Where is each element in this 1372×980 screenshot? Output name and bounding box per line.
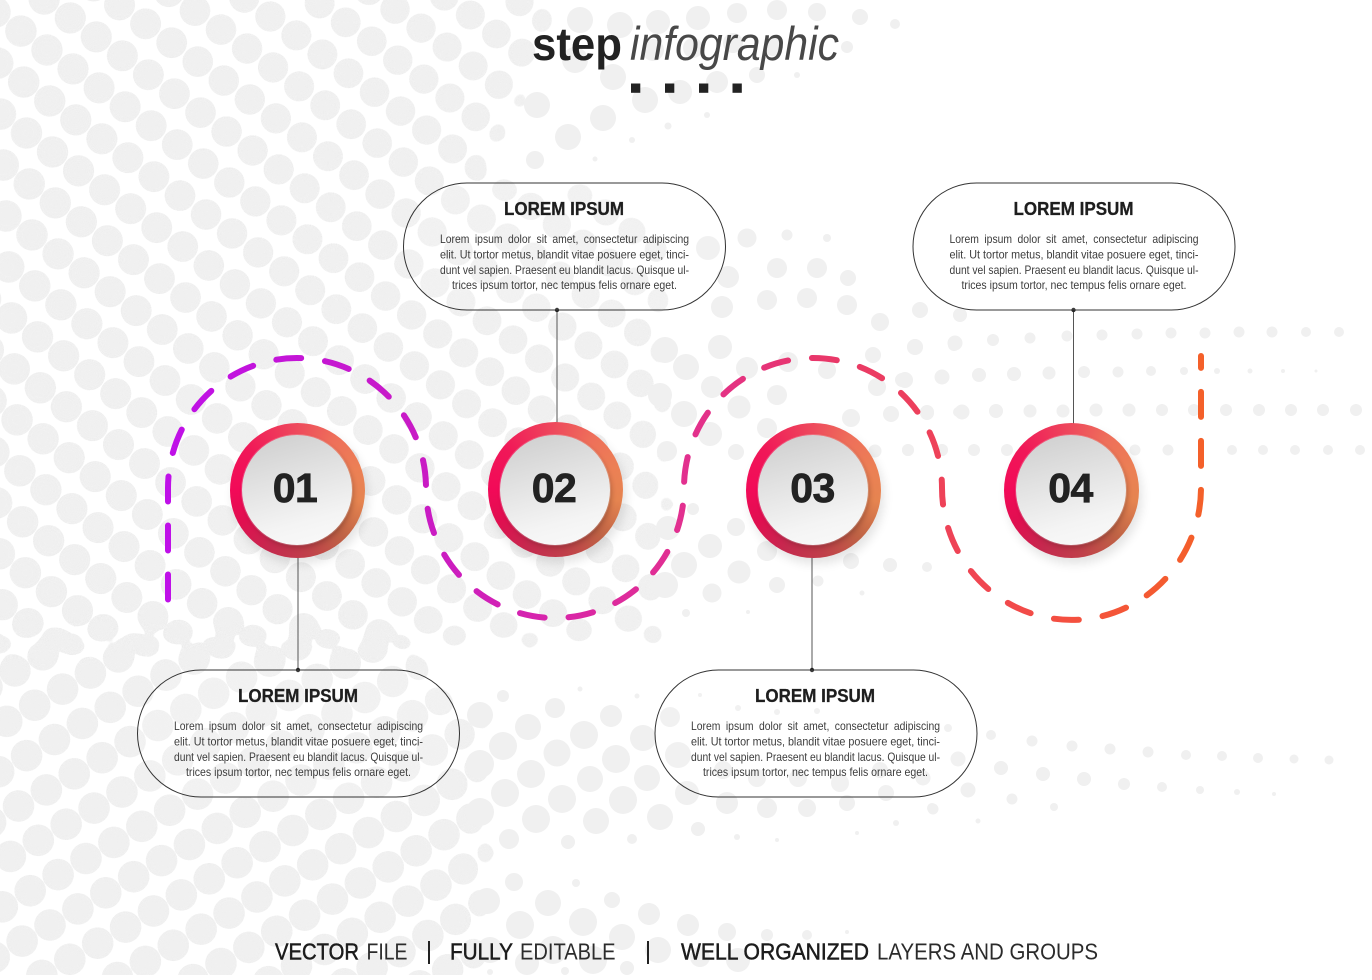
body text 03: elit. Ut tortor metus, blandit vitae posuere eget, tinci- bbox=[691, 734, 940, 748]
body text 04 bbox=[950, 232, 1198, 292]
connector 02 bbox=[555, 308, 559, 424]
body text 03: Lorem ipsum dolor sit amet, consectetur adipiscing bbox=[691, 719, 940, 733]
panel: callout 02 bbox=[404, 183, 726, 424]
pill outline 02 bbox=[404, 183, 726, 310]
pill outline 03 bbox=[655, 670, 977, 797]
title bbox=[532, 17, 839, 70]
step badge 03: 03 bbox=[790, 465, 835, 511]
step badge 04 bbox=[1004, 422, 1139, 558]
step badge 01 bbox=[230, 422, 364, 558]
body text 04: trices ipsum tortor, nec tempus felis ornare eget. bbox=[962, 278, 1186, 292]
step badge 02 bbox=[488, 422, 622, 557]
connector 04 bbox=[1071, 308, 1076, 424]
footer text: EDITABLE bbox=[520, 938, 616, 964]
heading 04: LOREM IPSUM bbox=[1014, 199, 1134, 219]
title: infographic bbox=[630, 17, 839, 70]
panel: callout 04 bbox=[913, 183, 1235, 424]
body text 01 bbox=[174, 719, 423, 779]
footer text: LAYERS AND GROUPS bbox=[877, 938, 1098, 964]
step badge 01: 01 bbox=[273, 465, 317, 511]
footer text bbox=[275, 938, 1098, 964]
lower middle dots bbox=[466, 686, 937, 861]
body text 04: elit. Ut tortor metus, blandit vitae posuere eget, tinci- bbox=[950, 248, 1198, 262]
top edge dots bbox=[524, 0, 900, 169]
heading 01: LOREM IPSUM bbox=[238, 686, 358, 706]
footer text: WELL ORGANIZED bbox=[681, 938, 869, 964]
right tail dots bbox=[916, 724, 1334, 824]
body text 03: dunt vel sapien. Praesent eu blandit lacus. Quisque ul- bbox=[691, 750, 940, 764]
connector 01 bbox=[296, 556, 300, 672]
right band dots bbox=[897, 326, 1365, 456]
heading 03: LOREM IPSUM bbox=[755, 686, 875, 706]
body text 02: dunt vel sapien. Praesent eu blandit lacus. Quisque ul- bbox=[440, 263, 689, 277]
footer text: VECTOR bbox=[275, 938, 359, 964]
title: step bbox=[532, 18, 622, 70]
body text 03: trices ipsum tortor, nec tempus felis ornare eget. bbox=[703, 765, 928, 779]
footer text: FULLY bbox=[450, 938, 513, 964]
step badge 02: 02 bbox=[532, 464, 576, 510]
connector 03 bbox=[810, 556, 814, 672]
step badge 03 bbox=[746, 422, 881, 558]
pill outline 01 bbox=[138, 670, 460, 797]
body text 01: trices ipsum tortor, nec tempus felis ornare eget. bbox=[186, 765, 411, 779]
panel: callout 03 bbox=[655, 556, 977, 797]
body text 02: elit. Ut tortor metus, blandit vitae posuere eget, tinci- bbox=[440, 248, 689, 262]
panel: callout 01 bbox=[138, 556, 460, 797]
body text 01: dunt vel sapien. Praesent eu blandit lacus. Quisque ul- bbox=[174, 750, 423, 764]
body text 02 bbox=[440, 232, 689, 292]
body text 01: elit. Ut tortor metus, blandit vitae posuere eget, tinci- bbox=[174, 734, 423, 748]
footer text: FILE bbox=[366, 938, 408, 964]
title square dots bbox=[631, 84, 742, 93]
body text 02: Lorem ipsum dolor sit amet, consectetur adipiscing bbox=[440, 232, 689, 246]
body text 04: dunt vel sapien. Praesent eu blandit lacus. Quisque ul- bbox=[950, 263, 1198, 277]
middle band dots bbox=[648, 228, 967, 617]
bottom middle dots bbox=[474, 873, 849, 975]
body text 02: trices ipsum tortor, nec tempus felis ornare eget. bbox=[452, 278, 677, 292]
step badge 04: 04 bbox=[1048, 465, 1093, 511]
body text 01: Lorem ipsum dolor sit amet, consectetur adipiscing bbox=[174, 719, 423, 733]
body text 03 bbox=[691, 719, 940, 779]
body text 04: Lorem ipsum dolor sit amet, consectetur adipiscing bbox=[950, 232, 1198, 246]
pill outline 04 bbox=[913, 183, 1235, 310]
heading 02: LOREM IPSUM bbox=[504, 199, 624, 219]
